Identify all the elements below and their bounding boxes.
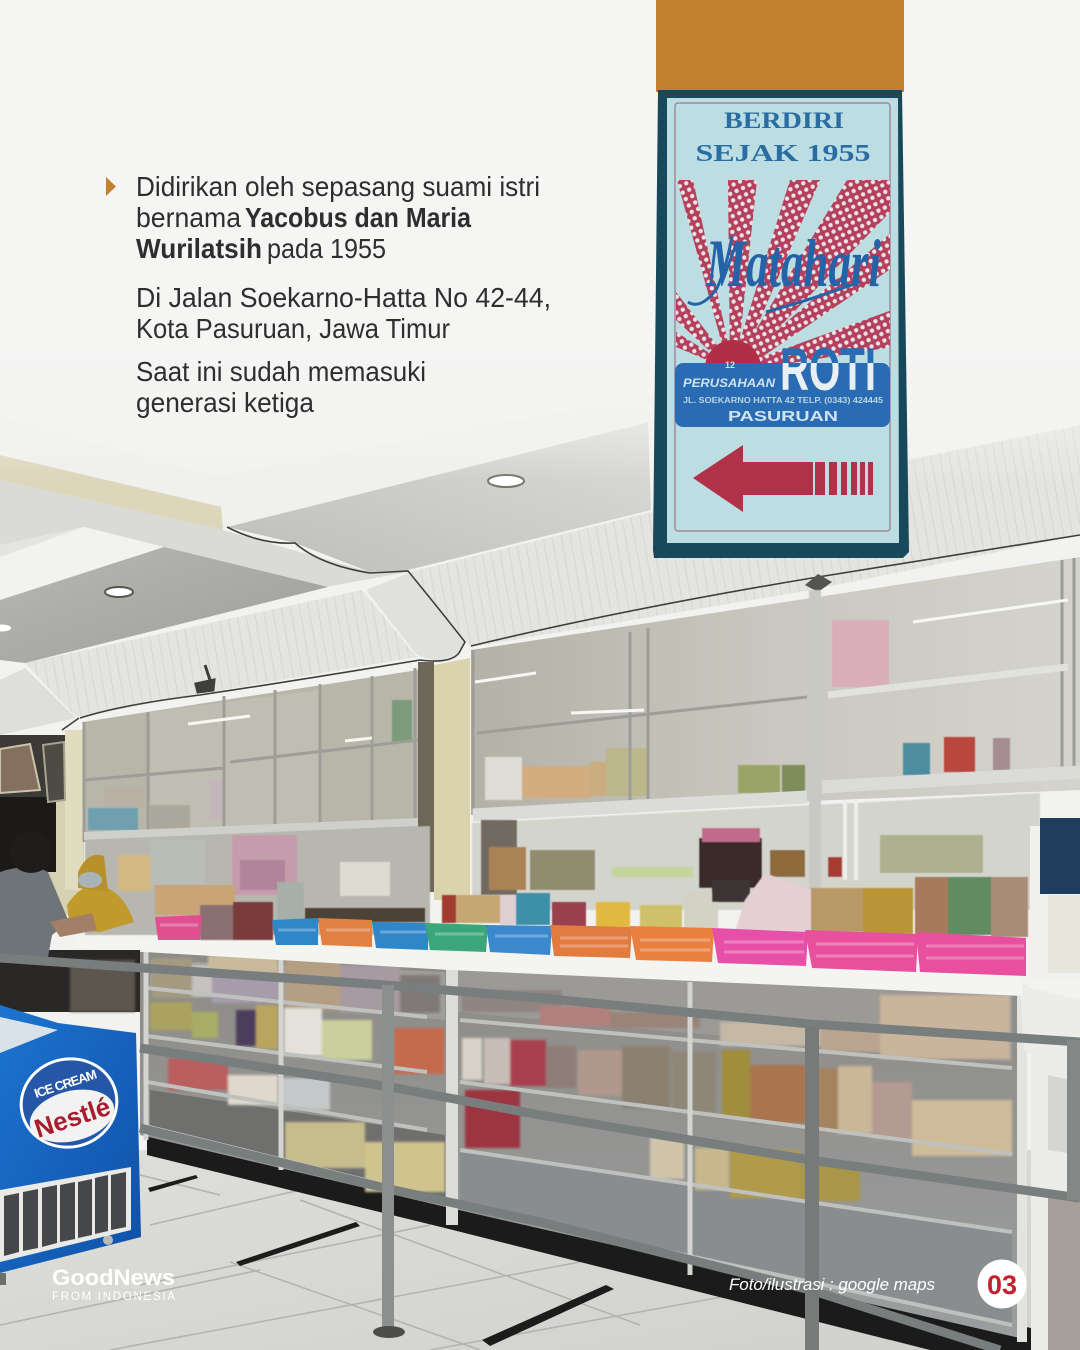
- sign heading: [696, 108, 870, 167]
- sign blue band: 12: [725, 360, 735, 370]
- people at the counter: [0, 831, 140, 1012]
- sign blue band: PERUSAHAAN: [683, 378, 776, 390]
- sign heading: BERDIRI: [724, 108, 844, 133]
- sign blue band: ROTI: [780, 336, 876, 403]
- case frames: [146, 950, 1038, 1350]
- goods on the counter: [155, 873, 1028, 940]
- ceiling wires: [62, 527, 1080, 730]
- freezer vent: [0, 1167, 131, 1262]
- sun rays: [676, 180, 890, 363]
- text block: history: pada 1955: [267, 233, 386, 264]
- text block: address: [136, 282, 551, 344]
- sign blue band: ROTI: [780, 336, 876, 403]
- sign frame: [653, 90, 909, 558]
- text block: history: [136, 171, 540, 264]
- floor: [0, 1150, 1080, 1350]
- baskets: [155, 915, 1026, 976]
- text block: history: Wurilatsih: [136, 233, 262, 264]
- sign blue band: JL. SOEKARNO HATTA 42 TELP. (0343) 424445: [683, 396, 884, 405]
- upper display cabinets: [0, 557, 1080, 915]
- logo: GoodNews from Indonesia: [52, 1265, 175, 1303]
- camera: [196, 665, 214, 692]
- Nestle ice cream freezer: [0, 1005, 141, 1285]
- white fade over the top of the photo: [0, 0, 1080, 480]
- photo credit: Foto/ilustrasi : google maps: [729, 1275, 936, 1294]
- sign heading: SEJAK 1955: [696, 141, 870, 167]
- ochre tab: [656, 0, 904, 92]
- text block: generation: Saat ini sudah memasuki: [136, 356, 426, 387]
- hanging sign: Matahari: [653, 90, 909, 558]
- sign script logo: Matahari: [705, 225, 881, 301]
- display case: [75, 935, 1080, 1350]
- freezer logo: ICE CREAM: [32, 1067, 99, 1101]
- text block: generation: generasi ketiga: [136, 387, 315, 418]
- railing: [0, 958, 1080, 1350]
- page number badge: 03: [987, 1270, 1017, 1300]
- text block: generation: [136, 356, 426, 418]
- sign script logo: [688, 225, 881, 312]
- freezer logo: Nestlé: [31, 1091, 114, 1144]
- snack packs in display case: [150, 955, 1012, 1201]
- sign arrow: [693, 445, 873, 512]
- sign blue band: PASURUAN: [728, 408, 838, 425]
- lower back shelves: [85, 590, 1040, 935]
- text block: address: Di Jalan Soekarno-Hatta No 42-44,: [136, 282, 551, 313]
- logo: GoodNews from Indonesia: FROM INDONESIA: [52, 1291, 175, 1303]
- freezer logo: [13, 1050, 125, 1156]
- right-side machine: [1030, 818, 1080, 980]
- text block: history: bernama: [136, 202, 242, 233]
- sign blue band: [675, 348, 890, 427]
- pink box and goods on upper shelves: [88, 620, 1010, 830]
- sign face: [667, 98, 899, 543]
- logo: GoodNews from Indonesia: GoodNews: [52, 1265, 175, 1290]
- page number badge: [978, 1260, 1026, 1308]
- bullet triangle: [106, 177, 116, 196]
- text block: history: Didirikan oleh sepasang suami istri: [136, 171, 540, 202]
- text block: address: Kota Pasuruan, Jawa Timur: [136, 313, 450, 344]
- text block: history: Yacobus dan Maria: [245, 202, 472, 233]
- ceiling: [0, 395, 1080, 735]
